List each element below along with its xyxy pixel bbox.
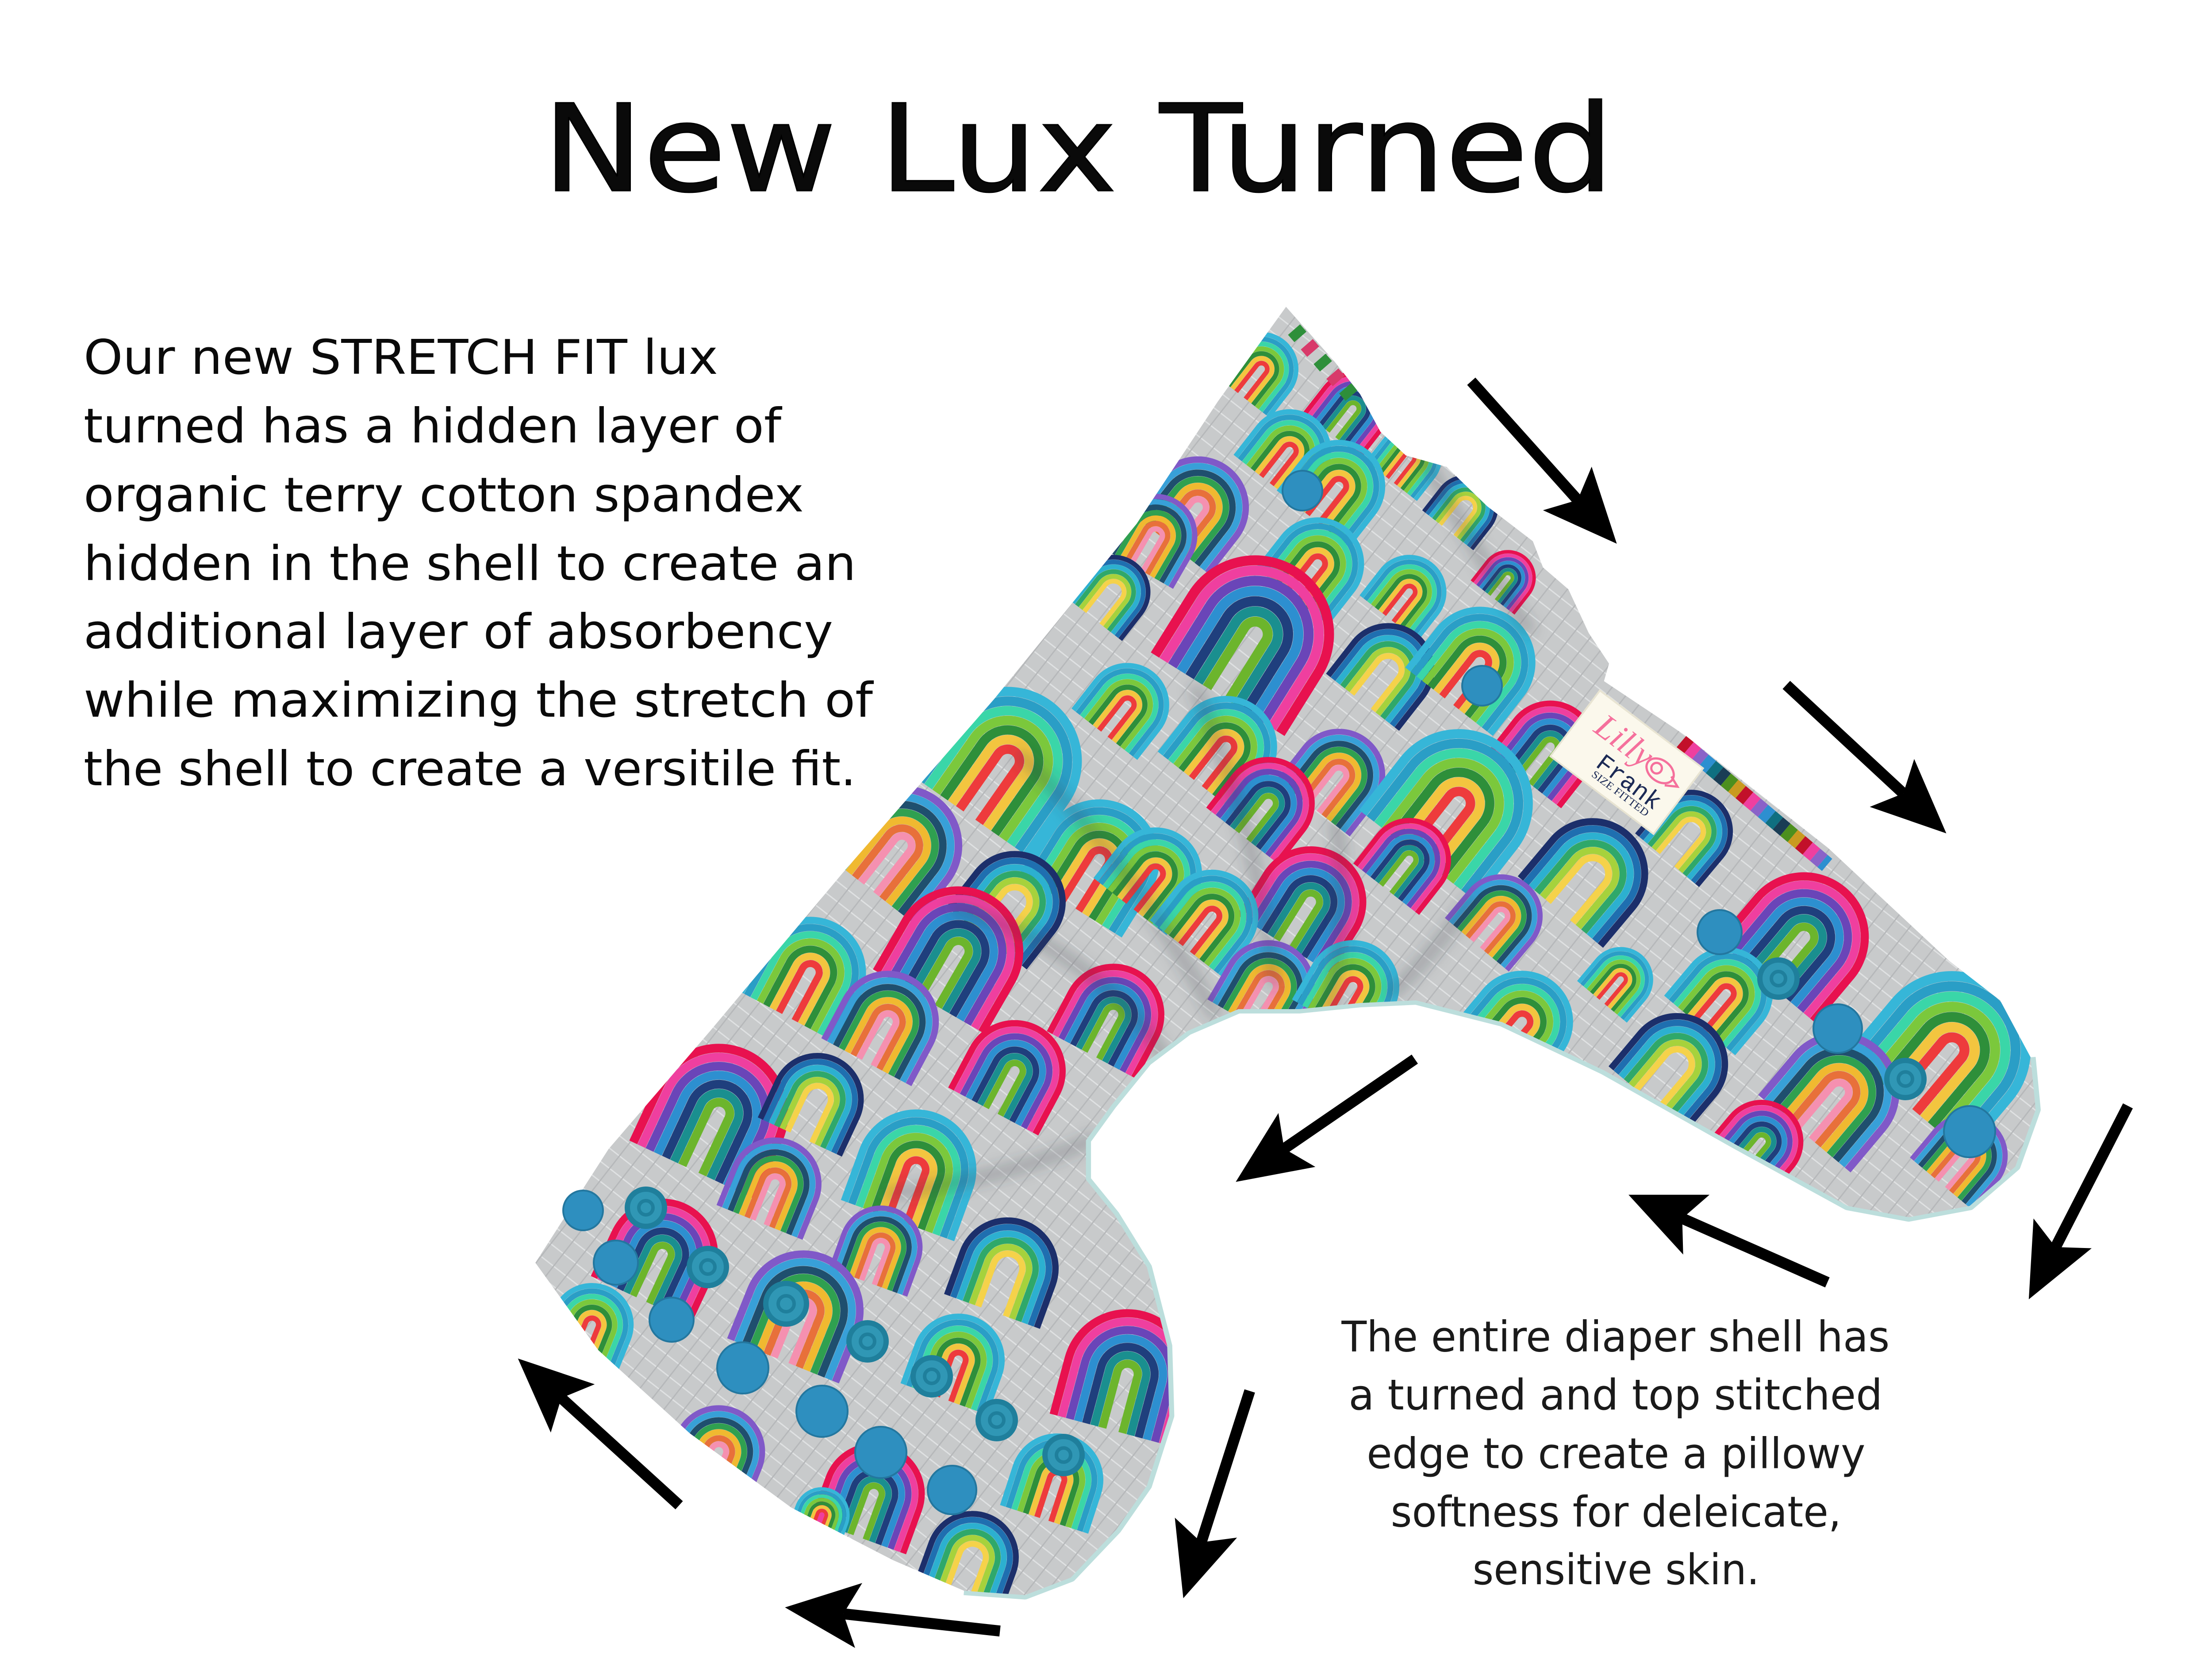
text block: stretch fit description	[84, 330, 874, 797]
text block: turned edge caption: softness for deleicate,	[1391, 1487, 1841, 1536]
text block: stretch fit description: hidden in the shell to create an	[84, 536, 856, 591]
snap caps	[563, 471, 1995, 1514]
arrow: under tab	[1682, 1218, 1828, 1283]
sewn label: Lilly	[1588, 706, 1662, 775]
arrow: lower wing right	[1201, 1391, 1250, 1542]
text block: stretch fit description: while maximizing the stretch of	[84, 673, 874, 728]
arrow: top edge 1	[1471, 381, 1578, 500]
diaper cuff edge	[964, 1000, 2035, 1595]
sewn label: Frank	[1590, 749, 1667, 817]
text block: turned edge caption: a turned and top stitched	[1348, 1370, 1882, 1420]
icon: pink bird logo	[1642, 753, 1685, 793]
text block: turned edge caption	[1341, 1312, 1889, 1594]
diaper photo illustration	[535, 307, 2041, 1600]
text block: stretch fit description: organic terry cotton spandex	[84, 468, 804, 523]
arrow: lower wing left	[561, 1398, 679, 1505]
snap sockets	[627, 960, 1924, 1474]
diaper fabric with rainbow print	[535, 307, 2036, 1595]
gathered fold shading	[885, 398, 1531, 1194]
text block: turned edge caption: sensitive skin.	[1473, 1545, 1759, 1594]
arrow: lower wing bottom	[843, 1614, 1000, 1631]
selvedge stripes	[1294, 330, 1827, 865]
sewn label: SIZE FITTED	[1589, 768, 1651, 819]
text block: stretch fit description: Our new STRETCH FIT lux	[84, 330, 718, 385]
text block: stretch fit description: additional layer of absorbency	[84, 604, 833, 660]
arrow: leg opening	[1284, 1059, 1415, 1148]
title: New Lux Turned	[542, 79, 1614, 219]
arrow: top edge 2	[1786, 685, 1903, 794]
text block: turned edge caption: The entire diaper shell has	[1341, 1312, 1889, 1361]
arrow: right tab end	[2055, 1106, 2128, 1247]
text block: turned edge caption: edge to create a pillowy	[1367, 1429, 1865, 1479]
rainbow print	[541, 320, 2056, 1611]
text block: stretch fit description: the shell to create a versitile fit.	[84, 741, 856, 797]
text block: stretch fit description: turned has a hidden layer of	[84, 399, 783, 454]
sewn label	[1550, 691, 1703, 834]
